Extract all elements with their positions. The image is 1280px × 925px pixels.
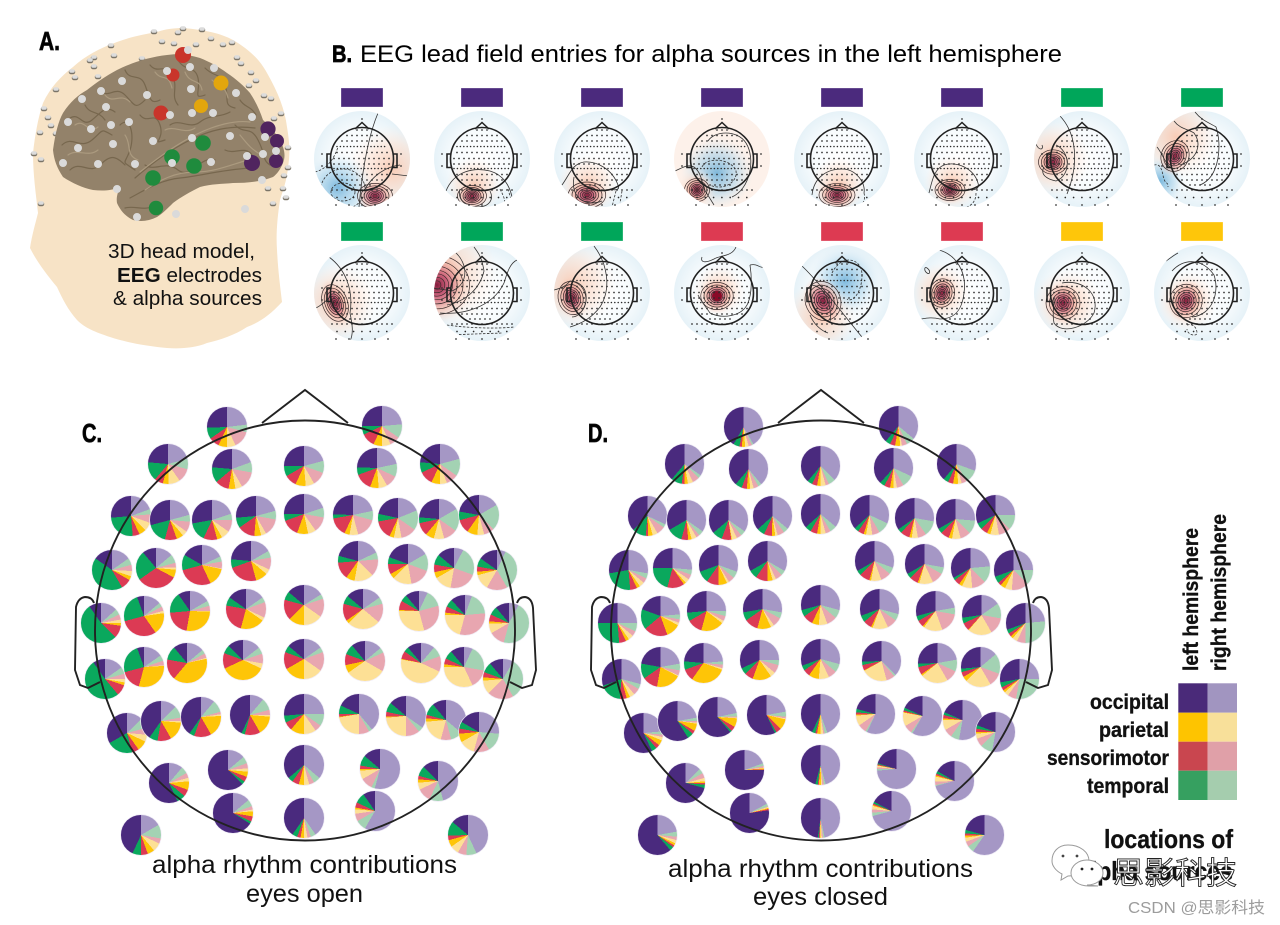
- scalp electrodes: [33, 28, 289, 204]
- map 13 sensorimotor: [794, 222, 890, 341]
- panel A caption: 3D head model,: [108, 241, 255, 263]
- map 2 occipital: [434, 88, 530, 213]
- panel D: eyes closed pie topography: [588, 388, 1053, 911]
- legend: brain regions and hemispheres: [1047, 514, 1265, 917]
- legend column headers: [1180, 514, 1231, 671]
- alpha sources: green: [145, 135, 211, 215]
- panel A caption: EEG electrodes: [117, 265, 262, 287]
- brain: [53, 54, 284, 221]
- panel B: EEG lead field topographies: [314, 41, 1250, 341]
- panel B title: B.: [332, 41, 352, 68]
- legend row labels: sensorimotor: [1047, 747, 1169, 770]
- head outline, label and caption, eyes closed: [588, 388, 1053, 911]
- legend column headers: right hemisphere: [1208, 514, 1231, 671]
- map 10 temporal: [434, 222, 530, 341]
- legend column headers: left hemisphere: [1180, 528, 1203, 671]
- legend title: [1078, 824, 1233, 886]
- head outline, label and caption, eyes open: [74, 388, 537, 908]
- map 8 temporal: [1154, 88, 1250, 207]
- alpha sources: yellow: [194, 76, 228, 113]
- legend row labels: parietal: [1099, 719, 1169, 742]
- alpha sources: purple: [244, 121, 284, 171]
- map 9 temporal: [314, 222, 410, 341]
- legend title: alpha sources: [1078, 856, 1233, 886]
- legend row labels: [1047, 691, 1169, 798]
- legend row labels: occipital: [1090, 691, 1169, 714]
- brain folds: [62, 60, 270, 208]
- map 14 sensorimotor: [910, 222, 1010, 341]
- map 3 occipital: [554, 88, 650, 215]
- watermark icon: chat bubbles: [1052, 845, 1103, 886]
- head outline, label and caption, eyes open: eyes open: [246, 880, 363, 908]
- head outline, label and caption, eyes open: alpha rhythm contributions: [152, 851, 457, 879]
- head outline, label and caption, eyes closed: eyes closed: [753, 883, 888, 911]
- legend row labels: temporal: [1087, 775, 1169, 798]
- panel C: eyes open pie topography: [74, 388, 537, 908]
- head outline, label and caption, eyes closed: alpha rhythm contributions: [668, 855, 973, 883]
- map 7 temporal: [1034, 88, 1130, 207]
- map 4 occipital: [674, 88, 770, 209]
- EEG electrodes on brain: [63, 50, 276, 217]
- legend colour swatches: [1178, 683, 1237, 800]
- panel A caption: [108, 241, 262, 310]
- panel A caption: & alpha sources: [113, 288, 262, 310]
- map 12 sensorimotor: [674, 222, 770, 341]
- panel A heading: A.: [39, 26, 60, 56]
- alpha sources: red: [154, 47, 191, 120]
- pie charts at electrode positions, eyes open: [80, 405, 530, 856]
- head outline, label and caption, eyes closed: D.: [588, 418, 608, 448]
- head outline, label and caption, eyes open: C.: [82, 418, 102, 448]
- map 15 parietal: [1033, 222, 1130, 341]
- pie charts at electrode positions, eyes closed: [598, 405, 1046, 856]
- map 1 occipital: [314, 88, 410, 207]
- map 11 temporal: [554, 222, 650, 341]
- map 5 occipital: [794, 88, 890, 213]
- watermark text: 思影科技: [1113, 848, 1237, 893]
- legend title: locations of: [1104, 824, 1233, 854]
- source credit: CSDN @思影科技: [1128, 899, 1265, 917]
- map 6 occipital: [914, 88, 1010, 211]
- head silhouette: [30, 28, 289, 348]
- panel A: 3D head model: [30, 26, 292, 348]
- panel B title: EEG lead field entries for alpha sources in the left hemisphere: [360, 41, 1062, 68]
- map 16 parietal: [1154, 222, 1250, 341]
